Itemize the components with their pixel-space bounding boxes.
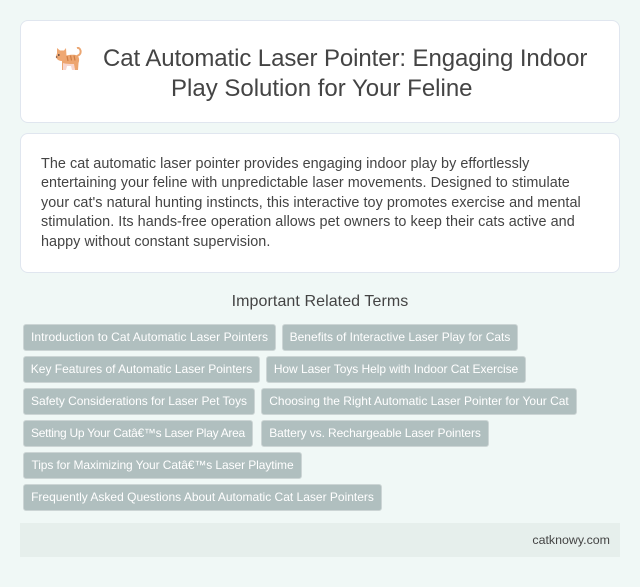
tag bbox=[261, 420, 489, 447]
tag list bbox=[23, 324, 577, 511]
title: Play Solution for Your Feline bbox=[171, 75, 473, 102]
tag: Safety Considerations for Laser Pet Toys bbox=[31, 394, 247, 408]
tag bbox=[282, 324, 518, 351]
tag bbox=[261, 388, 577, 415]
text block: description: The cat automatic laser pointer provides engaging indoor play by effortlessly bbox=[41, 156, 529, 172]
text block: description bbox=[41, 156, 581, 250]
panel: title card bbox=[20, 20, 620, 123]
footer source text: catknowy.com bbox=[532, 533, 610, 547]
text block: description: stimulation. Its hands-free operation allows pet owners to keep their cats active and bbox=[41, 214, 575, 230]
footer bar bbox=[20, 523, 620, 557]
tag: Key Features of Automatic Laser Pointers bbox=[31, 362, 252, 376]
tag bbox=[23, 388, 255, 415]
panel: description bbox=[20, 133, 620, 273]
title: Cat Automatic Laser Pointer: Engaging Indoor bbox=[103, 45, 587, 72]
tag: Introduction to Cat Automatic Laser Pointers bbox=[31, 330, 268, 344]
tag: Battery vs. Rechargeable Laser Pointers bbox=[269, 426, 481, 440]
tag bbox=[23, 324, 276, 351]
tag: Choosing the Right Automatic Laser Pointer for Your Cat bbox=[269, 394, 569, 408]
heading: related terms: Important Related Terms bbox=[232, 293, 408, 310]
text block: description: your cat's natural hunting instincts, this interactive toy promotes exercise and mental bbox=[41, 195, 581, 211]
tag: Benefits of Interactive Laser Play for Cats bbox=[290, 330, 510, 344]
text block: description: happy without constant supervision. bbox=[41, 234, 270, 250]
tag bbox=[23, 356, 260, 383]
icon: cat bbox=[56, 47, 82, 70]
tag bbox=[23, 484, 382, 511]
title bbox=[103, 45, 587, 102]
tag bbox=[23, 452, 302, 479]
text block: description: entertaining your feline with unpredictable laser movements. Designed to stimulate bbox=[41, 175, 570, 191]
tag: How Laser Toys Help with Indoor Cat Exercise bbox=[274, 362, 518, 376]
tag bbox=[23, 420, 253, 447]
tag: Setting Up Your Catâ€™s Laser Play Area bbox=[31, 426, 245, 440]
tag bbox=[266, 356, 526, 383]
tag: Frequently Asked Questions About Automatic Cat Laser Pointers bbox=[31, 490, 374, 504]
tag: Tips for Maximizing Your Catâ€™s Laser Playtime bbox=[31, 458, 294, 472]
